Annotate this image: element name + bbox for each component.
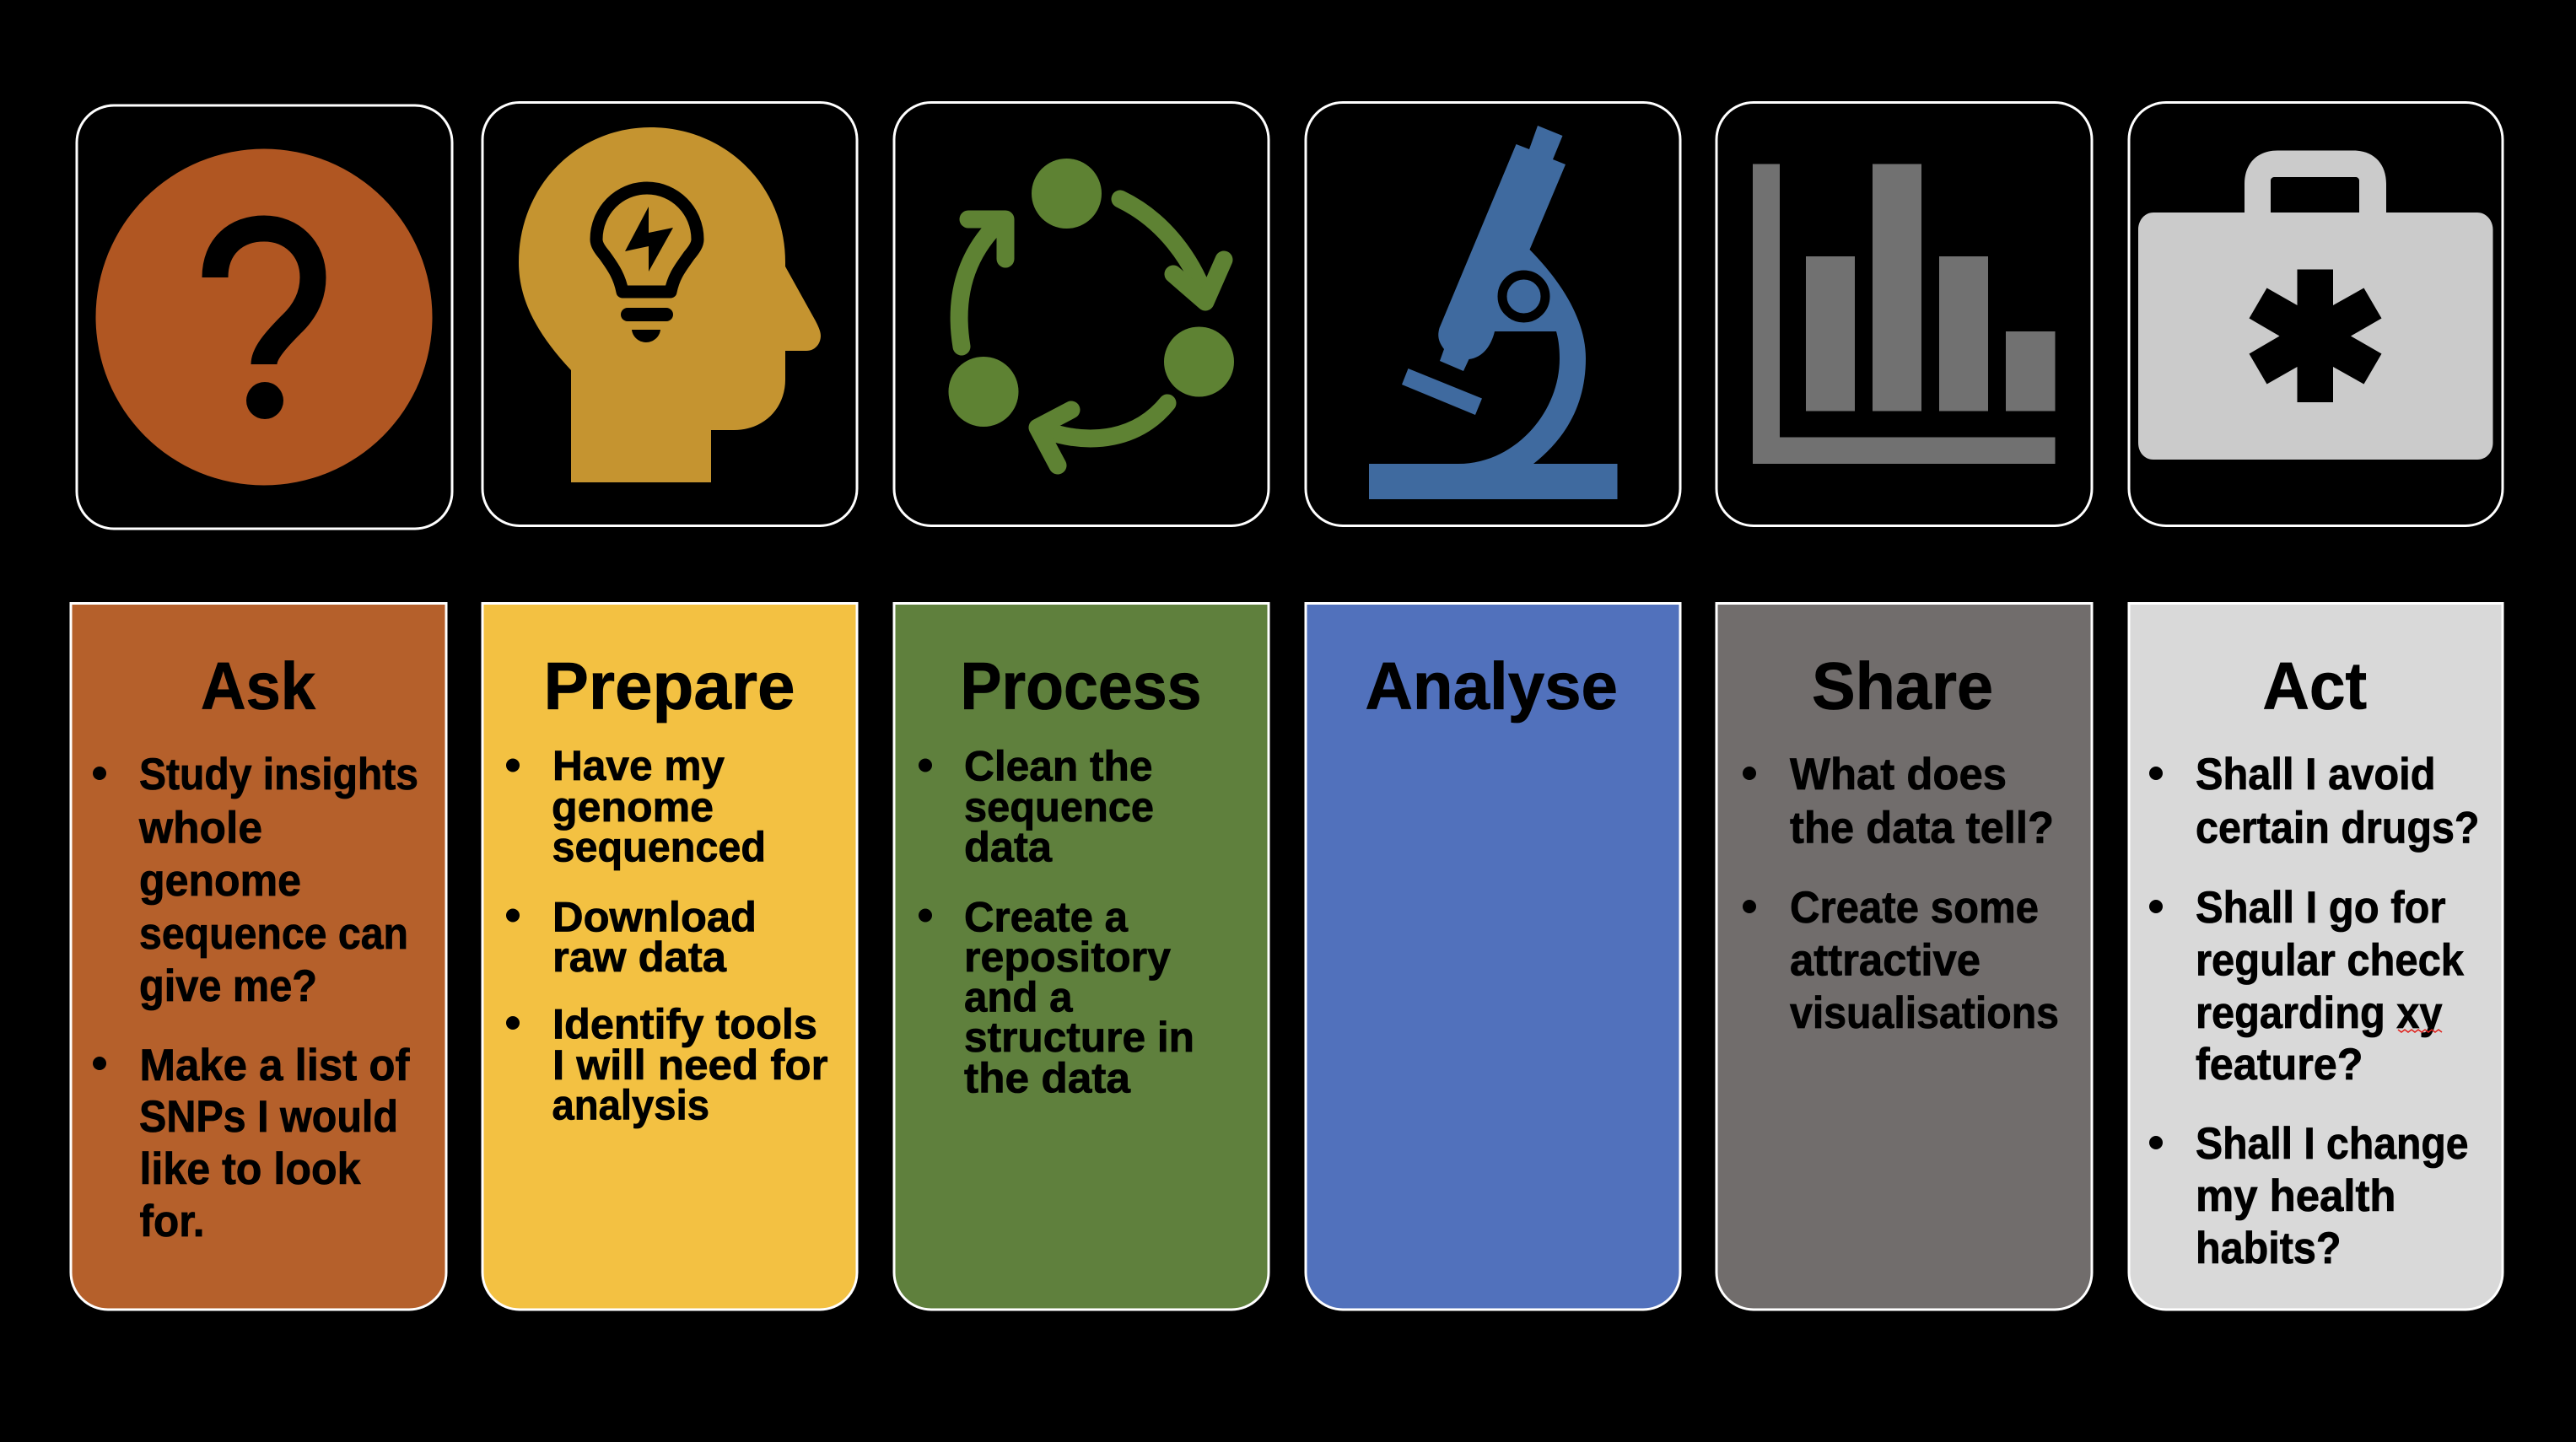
bullet list: Ask: for. (140, 1197, 204, 1246)
icon card: question mark (77, 105, 452, 529)
icon: three circles with cycle arrows (948, 159, 1234, 465)
bullet list: Process: and a (964, 973, 1074, 1020)
bullet list: Process: repository (964, 934, 1171, 981)
bullet list: Act (2149, 750, 2480, 1273)
bullet list: Prepare: genome (552, 783, 714, 831)
heading: Share: Share (1812, 648, 1993, 724)
icon: head with light bulb (519, 127, 821, 482)
bullet list: Act: Shall I change (2196, 1119, 2468, 1169)
icon: question mark in circle (96, 148, 432, 486)
bullet list: Prepare: raw data (552, 934, 727, 981)
bullet list: Ask: Study insights (139, 750, 418, 799)
icon: bar chart (1753, 164, 2055, 464)
icon card: head with light bulb (482, 103, 857, 526)
bullet list: Share: the data tell? (1790, 803, 2054, 853)
bullet list: Process: sequence (964, 783, 1154, 831)
bullet list: Process: Create a (964, 894, 1129, 941)
bullet list: Process: structure in (964, 1014, 1194, 1061)
panel: Analyse (1306, 604, 1680, 1310)
heading: Prepare: Prepare (543, 648, 795, 724)
icon: microscope (1369, 126, 1618, 499)
heading: Analyse: Analyse (1365, 648, 1618, 724)
bullet list: Prepare: sequenced (552, 823, 766, 870)
bullet list: Share: attractive (1790, 936, 1981, 985)
icon card: medical kit (2129, 103, 2503, 526)
panel: Process (894, 604, 1269, 1310)
bullet list: Ask (93, 750, 418, 1246)
bullet list: Share (1743, 750, 2059, 1038)
bullet list: Prepare: I will need for (552, 1041, 828, 1089)
heading: Process: Process (960, 648, 1201, 724)
bullet list: Act: my health (2196, 1171, 2395, 1221)
bullet list: Prepare: Have my (552, 742, 725, 789)
icon card: bar chart (1716, 103, 2092, 526)
bullet list: Prepare: analysis (552, 1081, 709, 1128)
bullet list: Ask: sequence can (139, 909, 408, 959)
panel: Ask (71, 604, 446, 1310)
bullet list: Ask: like to look (140, 1144, 361, 1194)
bullet list: Ask: Make a list of (140, 1041, 410, 1090)
bullet list: Act: certain drugs? (2196, 803, 2480, 853)
bullet list: Prepare (506, 742, 828, 1128)
bullet list: Prepare: Identify tools (552, 1000, 817, 1047)
icon card: microscope (1306, 103, 1680, 526)
bullet list: Act: habits? (2196, 1224, 2342, 1273)
bullet list: Ask: give me? (139, 961, 317, 1011)
bullet list: Share: Create some (1790, 883, 2039, 933)
bullet list: Process: Clean the (964, 742, 1152, 789)
bullet list: Act: feature? (2196, 1040, 2363, 1090)
icon: medical kit (2138, 150, 2493, 460)
bullet list: Ask: SNPs I would (139, 1092, 398, 1142)
bullet list: Ask: whole (138, 803, 262, 853)
bullet list: Act: Shall I avoid (2196, 750, 2436, 799)
icon card: cycle (894, 103, 1269, 526)
panel: Act (2129, 604, 2503, 1310)
bullet list: Act: Shall I go for (2196, 883, 2446, 933)
panel: Prepare (482, 604, 857, 1310)
bullet list: Share: What does (1790, 750, 2007, 799)
bullet list: Process: the data (964, 1054, 1131, 1101)
bullet list: Act: regular check (2196, 936, 2464, 985)
bullet list: Process (919, 742, 1194, 1101)
panel: Share (1716, 604, 2092, 1310)
bullet list: Ask: genome (139, 856, 301, 906)
heading: Ask: Ask (201, 648, 316, 724)
bullet list: Prepare: Download (552, 894, 757, 941)
bullet list: Share: visualisations (1790, 988, 2059, 1038)
bullet list: Process: data (964, 823, 1053, 870)
bullet list: Act: regarding xy (2196, 988, 2443, 1038)
heading: Act: Act (2262, 648, 2367, 724)
